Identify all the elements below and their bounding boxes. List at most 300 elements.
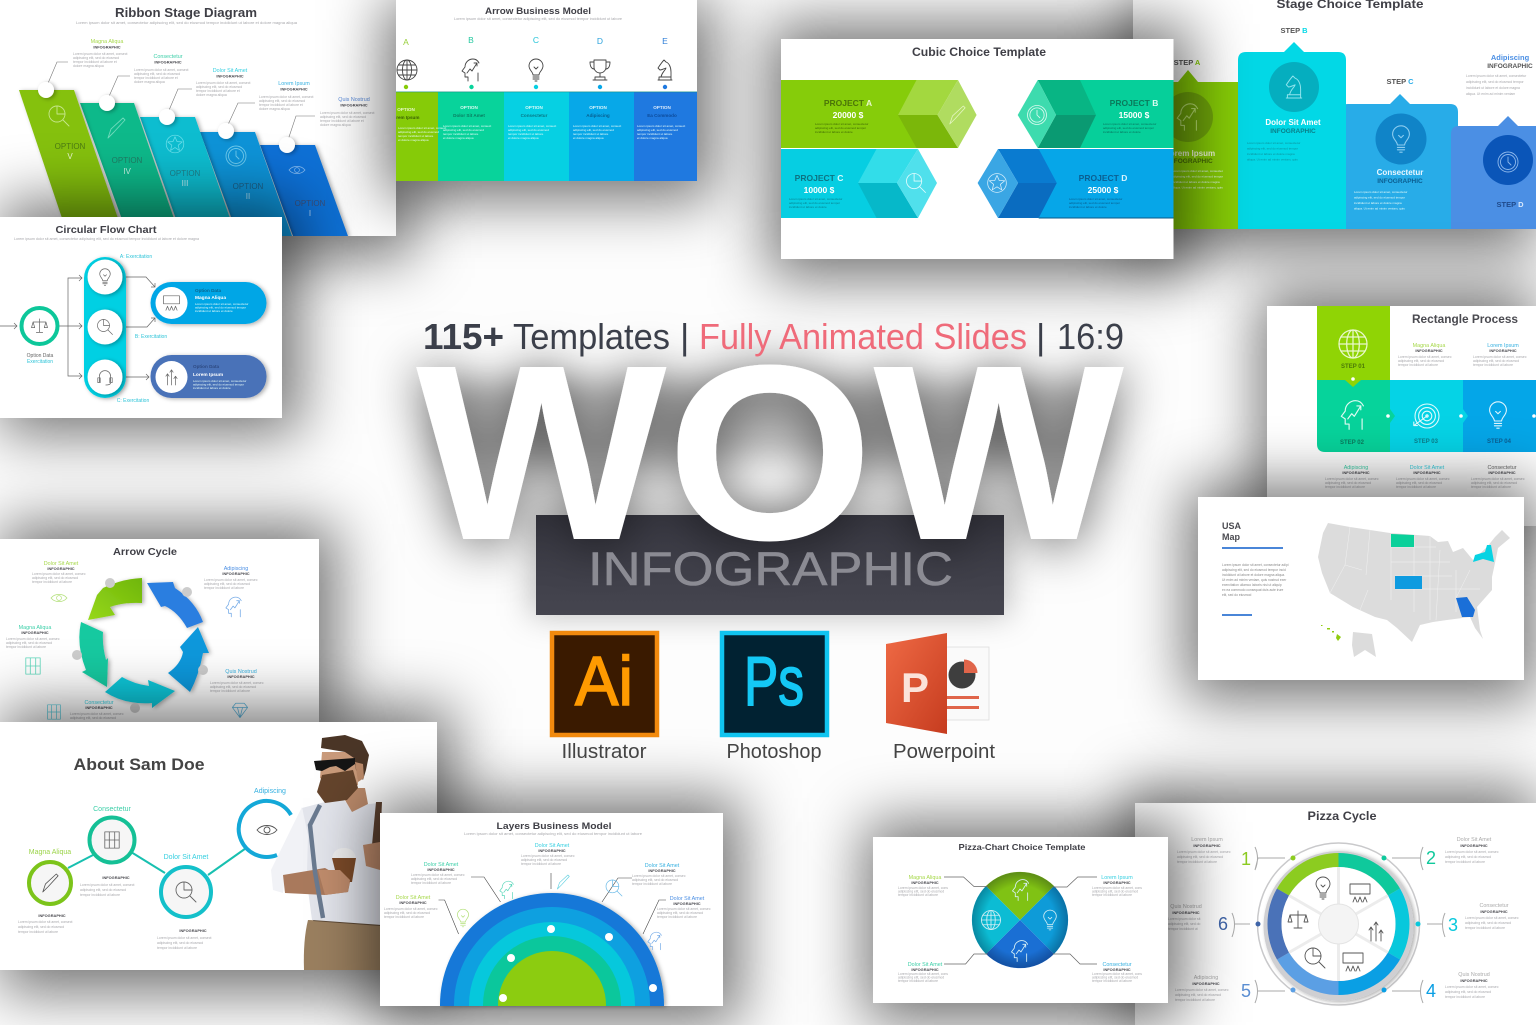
stage label: adipiscing: aliqua. Ut enim ad minim veniam [1466, 92, 1515, 96]
layer labels: adipiscing elit, sed do eiusmod [657, 911, 703, 915]
big WOW word: WOW [416, 313, 1124, 592]
rectangle labels: adipiscing elit, sed do eiusmod [1471, 481, 1517, 485]
four quadrant pie [972, 872, 1068, 968]
heading: pizza-chart choice template: Pizza-Chart Choice Template [958, 842, 1086, 852]
project D band and cube: incididunt ut labore et dolore [1069, 205, 1107, 209]
USA paragraph: Ut enim ad minim veniam, quis nostrud exer [1222, 578, 1287, 582]
column text: Adipiscing [586, 113, 610, 118]
pizza labels: Dolor Sit Amet [1457, 837, 1492, 843]
node: consectetur: Consectetur [93, 806, 132, 813]
project D band and cube: PROJECT D [1079, 173, 1127, 183]
cycle numbers [72, 578, 208, 713]
stage C [1340, 77, 1458, 229]
ribbon labels: Quis Nostrud [338, 97, 370, 103]
heading: about Sam Doe: About Sam Doe [74, 756, 204, 774]
about text blocks: tempor incididunt ut labore [18, 930, 58, 934]
panel: arrow business model: et dolore magna aliqua [398, 138, 429, 142]
steps 02 to 04 row: STEP 02 [1340, 440, 1365, 446]
rectangle labels: Lorem ipsum dolor sit amet, consec [1473, 355, 1527, 359]
pizza numbers: 3 [1448, 915, 1458, 935]
ribbon labels: tempor incididunt ut labore et [259, 103, 303, 107]
stage C: adipiscing elit, sed do eiusmod tempor [1354, 196, 1405, 200]
ribbon: option V [19, 88, 121, 217]
panel: circular flow chart: Lorem ipsum dolor sit amet, consectetur adipiscing elit, sed do eiusmod tempor incididunt ut labore et dolore magna [14, 237, 199, 241]
about text blocks: INFOGRAPHIC [102, 875, 130, 880]
heading: circular flow chart: Circular Flow Chart [56, 224, 157, 236]
USA paragraph: incididunt ut labore et dolore magna aliqua. [1222, 573, 1285, 577]
cycle labels: INFOGRAPHIC [47, 566, 75, 571]
cycle labels: tempor incididunt ut labore [6, 645, 46, 649]
stage C: incididunt ut labore et dolore magna [1354, 201, 1402, 205]
project D band and cube: Lorem ipsum dolor sit amet, consectetur [1069, 197, 1122, 201]
pie labels: INFOGRAPHIC [1103, 967, 1131, 972]
ribbon labels: INFOGRAPHIC [154, 60, 182, 64]
panel: pizza-chart choice template [873, 837, 1168, 1003]
panel: arrow business model: tempor incididunt ut labore [508, 132, 544, 136]
rectangle labels: adipiscing elit, sed do eiusmod [1396, 481, 1442, 485]
ribbon labels: Lorem ipsum dolor sit amet, consect [196, 81, 251, 85]
project A band and cube: Lorem ipsum dolor sit amet, consectetur [815, 122, 868, 126]
column letters [403, 37, 668, 45]
pizza labels: INFOGRAPHIC [1460, 978, 1488, 983]
pizza labels: INFOGRAPHIC [1172, 910, 1200, 915]
ribbon: option IV: IV [123, 167, 131, 176]
rectangle labels: adipiscing elit, sed do eiusmod [1473, 359, 1519, 363]
project B band and cube [1018, 80, 1174, 148]
columns A to E [396, 91, 697, 181]
panel: USA map [1198, 497, 1524, 680]
pie labels: INFOGRAPHIC [911, 967, 939, 972]
pizza labels: adipiscing elit, sed do [1168, 922, 1201, 926]
rectangle labels: Adipiscing [1344, 465, 1368, 471]
stage label: adipiscing: INFOGRAPHIC [1487, 63, 1533, 70]
stage C: aliqua. Ut enim ad minim veniam, quis [1354, 206, 1405, 210]
tagline: | [680, 316, 689, 357]
heading: cubic choice template: Cubic Choice Template [912, 47, 1046, 59]
project A band and cube: adipiscing elit, sed do eiusmod tempor [815, 126, 866, 130]
pizza labels: Lorem Ipsum [1191, 837, 1223, 843]
pizza labels: INFOGRAPHIC [1192, 981, 1220, 986]
heading: pizza cycle: Pizza Cycle [1308, 811, 1376, 823]
ribbon labels: adipiscing elit, sed do eiusmod [259, 99, 305, 103]
tagline: Fully Animated Slides [699, 316, 1027, 357]
ribbon labels: Consectetur [153, 54, 183, 60]
heading: ribbon stage diagram: Ribbon Stage Diagram [115, 6, 257, 20]
ribbon labels: Lorem ipsum dolor sit amet, consect [320, 111, 375, 115]
ribbon labels: adipiscing elit, sed do eiusmod [134, 72, 180, 76]
about text blocks: tempor incididunt ut labore [80, 893, 120, 897]
result pill: lorem ipsum: adipiscing elit, sed do eiusmod tempor [193, 383, 244, 387]
project C band and cube [781, 149, 937, 218]
node: dolor sit amet [161, 854, 211, 917]
panel: ribbon stage diagram [0, 0, 396, 236]
project B band and cube: 15000 $ [1119, 110, 1150, 120]
panel: arrow business model: adipiscing elit, sed do eiusmod [573, 128, 614, 132]
cycle labels: tempor incididunt ut labore [210, 689, 250, 693]
stage B: Dolor Sit Amet [1265, 118, 1321, 127]
flow labels: C: Exercitation [117, 398, 149, 404]
arrow: green [88, 578, 142, 620]
pie labels: tempor incididunt ut labore [898, 893, 938, 897]
tagline: 115+ [423, 316, 504, 357]
pie labels: tempor incididunt ut labore [1092, 979, 1132, 983]
layer labels: Lorem ipsum dolor sit amet, consec [411, 873, 465, 877]
stage B: adipiscing elit, sed do eiusmod tempor [1247, 146, 1298, 150]
cycle labels: tempor incididunt ut labore [204, 586, 244, 590]
ribbon: option IV [80, 102, 177, 217]
panel: arrow business model: tempor incididunt ut labore [637, 132, 673, 136]
pie leader lines [944, 877, 1097, 964]
pizza labels: tempor incididunt ut [1168, 927, 1198, 931]
panel: cubic choice template [781, 39, 1174, 259]
node: consectetur [90, 806, 134, 862]
rectangle labels [1325, 343, 1527, 489]
stage A: incididunt ut labore et dolore magna [1172, 180, 1220, 184]
dome layers [440, 893, 664, 1006]
heading: USA map: USA [1222, 521, 1242, 531]
pizza labels: tempor incididunt ut labore [1177, 860, 1217, 864]
column letters: D [597, 36, 603, 46]
cycle labels: adipiscing elit, sed do eiusmod [32, 576, 78, 580]
column letters: E [662, 36, 668, 46]
cycle labels: INFOGRAPHIC [222, 571, 250, 576]
rectangle labels: tempor incididunt ut labore [1473, 363, 1513, 367]
pizza labels: Lorem ipsum dolor sit amet, consec [1175, 988, 1229, 992]
pizza labels: Lorem ipsum dolor sit [1168, 917, 1200, 921]
stage C: Consectetur [1377, 168, 1423, 177]
pizza dots [1256, 856, 1420, 992]
pie labels: tempor incididunt ut labore [898, 979, 938, 983]
layer leader lines [438, 873, 666, 934]
pie labels: adipiscing elit, sed do eiusmod [898, 890, 944, 894]
result pill: lorem ipsum: incididunt ut labore et dolore [193, 386, 231, 390]
USA paragraph: Lorem ipsum dolor sit amet, consectetur adipi [1222, 563, 1289, 567]
rectangle labels: tempor incididunt ut labore [1325, 485, 1365, 489]
stage B: incididunt ut labore et dolore magna [1247, 152, 1295, 156]
cycle labels [6, 561, 264, 720]
flow labels: A: Exercitation [120, 254, 152, 260]
steps 02 to 04 row: STEP 03 [1414, 439, 1439, 445]
column text: Ea Commodo [647, 113, 677, 118]
rectangle labels: adipiscing elit, sed do eiusmod [1325, 481, 1371, 485]
tagline: Templates [513, 316, 670, 357]
stage A: STEP A [1174, 58, 1201, 67]
cycle icons [26, 594, 248, 719]
pizza numbers: 2 [1426, 848, 1436, 868]
pizza labels: Lorem ipsum dolor sit amet, consec [1445, 985, 1499, 989]
pie labels: Dolor Sit Amet [908, 962, 943, 968]
result pill: magna aliqua: Option Data [195, 288, 221, 293]
ribbon: option I [260, 145, 348, 236]
project A band and cube [781, 80, 977, 148]
icon: Illustrator: Ai [575, 642, 633, 720]
cycle labels: INFOGRAPHIC [85, 705, 113, 710]
ribbon labels: tempor incididunt ut labore et [320, 119, 364, 123]
stage D: STEP D [1497, 200, 1524, 209]
stage B: aliqua. Ut enim ad minim veniam, quis [1247, 158, 1298, 162]
ribbon labels: adipiscing elit, sed do eiusmod [320, 115, 366, 119]
pie labels: adipiscing elit, sed do eiusmod [1092, 976, 1138, 980]
stage C: INFOGRAPHIC [1377, 178, 1423, 185]
result pill: lorem ipsum [150, 355, 266, 398]
pizza numbers: 1 [1241, 849, 1251, 869]
pie icons [982, 880, 1056, 961]
node: magna aliqua: Magna Aliqua [29, 849, 71, 856]
panel: arrow business model: Lorem ipsum dolor sit amet, consectetur adipiscing elit, sed do eiusmod tempor incididunt ut labore [454, 17, 622, 21]
column text: Lorem Ipsum [391, 115, 419, 120]
ribbon: option V: OPTION [55, 142, 86, 151]
rectangle labels: Lorem ipsum dolor sit amet, consec [1398, 355, 1452, 359]
layer labels: INFOGRAPHIC [399, 900, 427, 905]
ribbon labels [73, 39, 375, 127]
step 01: STEP 01 [1341, 364, 1366, 370]
stage B: Lorem ipsum dolor sit amet, consectetur [1247, 141, 1300, 145]
column dots [404, 85, 667, 89]
stage label: adipiscing: adipiscing elit, sed do eiusmod tempor [1466, 80, 1525, 84]
panel: arrow business model [391, 0, 697, 181]
layer labels [384, 843, 711, 919]
panel: arrow business model: Lorem ipsum dolor sit amet, consect [443, 124, 491, 128]
layer labels: INFOGRAPHIC [427, 867, 455, 872]
ribbon markers [38, 82, 295, 153]
pizza labels: Quis Nostrud [1458, 972, 1490, 978]
heading: arrow business model: Arrow Business Model [485, 6, 591, 17]
label: Powerpoint: Powerpoint [893, 741, 995, 763]
vertical pill [84, 257, 126, 398]
ribbon labels: tempor incididunt ut labore et [196, 89, 240, 93]
arrow: cyan [105, 677, 175, 708]
ribbon: option III: III [182, 179, 188, 188]
pie labels: adipiscing elit, sed do eiusmod [1092, 890, 1138, 894]
panel: circular flow chart [0, 217, 282, 418]
layer labels: INFOGRAPHIC [673, 901, 701, 906]
column text: OPTION [460, 105, 478, 110]
ribbon: option II: II [246, 192, 250, 201]
pizza numbers: 4 [1426, 981, 1436, 1001]
flow labels: Exercitation [27, 359, 53, 365]
project A band and cube: PROJECT A [824, 98, 872, 108]
ribbon labels: INFOGRAPHIC [93, 44, 121, 50]
USA paragraph: adipiscing elit, sed do eiusmod tempor incid [1222, 568, 1286, 572]
panel: arrow business model: adipiscing elit, sed do eiusmod [443, 128, 484, 132]
panel: stage choice template [1133, 0, 1536, 229]
ribbon labels: tempor incididunt ut labore et [134, 76, 178, 80]
pizza labels: Adipiscing [1194, 975, 1218, 981]
USA paragraph: elit, sed do eiusmod [1222, 593, 1251, 597]
rectangle labels: Lorem ipsum dolor sit amet, consec [1396, 477, 1450, 481]
panel: arrow cycle [0, 539, 319, 722]
ribbon labels: dolore magna aliqua [259, 107, 290, 111]
panel: layers business model [380, 813, 723, 1006]
icon: Powerpoint [886, 633, 989, 734]
node: magna aliqua [29, 849, 71, 904]
panel: arrow business model: adipiscing elit, sed do eiusmod [398, 130, 439, 134]
about text blocks: adipiscing elit, sed do eiusmod [18, 925, 64, 929]
tagline: | [1036, 316, 1045, 357]
rectangle labels: Dolor Sit Amet [1410, 465, 1445, 471]
panel: layers business model: Lorem ipsum dolor sit amet, consectetur adipiscing elit, sed do eiusmod tempor incididunt ut labore [464, 832, 642, 836]
stage C: Lorem ipsum dolor sit amet, consectetur [1354, 190, 1407, 194]
ribbon labels: Lorem ipsum dolor sit amet, consect [73, 52, 128, 56]
ribbon labels: adipiscing elit, sed do eiusmod [73, 56, 119, 60]
pizza labels: tempor incididunt ut labore [1445, 860, 1485, 864]
project D band and cube: 25000 $ [1088, 185, 1119, 195]
ribbon leader lines [46, 62, 315, 143]
cycle labels: Consectetur [84, 700, 114, 706]
column letters: C [533, 35, 539, 45]
pizza labels: Consectetur [1479, 903, 1509, 909]
cycle labels: Lorem ipsum dolor sit amet, consec [6, 637, 60, 641]
rectangle labels: INFOGRAPHIC [1488, 470, 1516, 475]
ribbon labels: dolore magna aliqua [73, 64, 104, 68]
ribbon: option III: OPTION [170, 169, 201, 178]
layer icons [457, 875, 661, 950]
stage D [1451, 116, 1536, 229]
pizza numbers [1218, 848, 1458, 1001]
ribbon labels: Lorem ipsum dolor sit amet, consect [259, 95, 314, 99]
layer labels: Lorem ipsum dolor sit amet, consec [521, 854, 575, 858]
node: adipiscing: Adipiscing [254, 788, 286, 795]
project B band and cube: adipiscing elit, sed do eiusmod tempor [1103, 126, 1154, 130]
pizza labels: adipiscing elit, sed do eiusmod [1445, 855, 1491, 859]
rectangle labels: Consectetur [1487, 465, 1517, 471]
pizza labels: tempor incididunt ut labore [1445, 995, 1485, 999]
layer labels: INFOGRAPHIC [648, 868, 676, 873]
cycle labels: adipiscing elit, sed do eiusmod [70, 716, 116, 720]
panel: pizza cycle [1135, 803, 1536, 1025]
cycle labels: Adipiscing [224, 566, 248, 572]
ribbon labels: Lorem ipsum dolor sit amet, consect [134, 68, 189, 72]
rectangle labels: tempor incididunt ut labore [1396, 485, 1436, 489]
column letters: A [403, 37, 409, 47]
pizza labels: adipiscing elit, sed do eiusmod [1175, 993, 1221, 997]
pie labels: Lorem ipsum dolor sit amet, cons [898, 886, 948, 890]
project C band and cube: incididunt ut labore et dolore [789, 205, 827, 209]
node: adipiscing [239, 788, 295, 857]
panel: arrow business model: adipiscing elit, sed do eiusmod [637, 128, 678, 132]
pizza labels: Quis Nostrud [1170, 904, 1202, 910]
cycle labels: adipiscing elit, sed do eiusmod [204, 582, 250, 586]
panel: arrow business model: Lorem ipsum dolor sit amet, consect [508, 124, 556, 128]
pill nodes [88, 260, 122, 394]
pizza labels: INFOGRAPHIC [1193, 843, 1221, 848]
pie labels: tempor incididunt ut labore [1092, 893, 1132, 897]
result pill: magna aliqua: Magna Aliqua [195, 295, 226, 301]
pizza numbers: 5 [1241, 981, 1251, 1001]
panel: arrow business model: et dolore magna aliqua [443, 136, 474, 140]
rectangle labels: INFOGRAPHIC [1415, 348, 1443, 353]
about text blocks: tempor incididunt ut labore [157, 946, 197, 950]
icon: Illustrator [552, 633, 657, 735]
pizza labels: Lorem ipsum dolor sit amet, consec [1465, 916, 1519, 920]
ribbon: option III [140, 116, 233, 217]
project C band and cube: 10000 $ [804, 185, 835, 195]
pizza labels: adipiscing elit, sed do eiusmod [1465, 921, 1511, 925]
heading: arrow cycle: Arrow Cycle [113, 546, 177, 558]
layer labels: Dolor Sit Amet [645, 863, 680, 869]
layer labels: adipiscing elit, sed do eiusmod [632, 878, 678, 882]
layer labels: Lorem ipsum dolor sit amet, consec [632, 874, 686, 878]
label: Photoshop: Photoshop [726, 741, 822, 763]
ribbon: option II: OPTION [233, 182, 264, 191]
about text blocks [18, 875, 212, 950]
column text: Consectetur [521, 113, 548, 118]
result pill: magna aliqua: incididunt ut labore et dolore [195, 309, 233, 313]
pizza labels: tempor incididunt ut labore [1175, 998, 1215, 1002]
layer labels: Dolor Sit Amet [670, 896, 705, 902]
stage label: adipiscing [1466, 53, 1533, 96]
cycle labels: adipiscing elit, sed do eiusmod [6, 641, 52, 645]
layer labels: tempor incididunt ut labore [657, 915, 697, 919]
pizza labels: adipiscing elit, sed do eiusmod [1177, 855, 1223, 859]
tagline [423, 316, 1124, 357]
ribbon labels: INFOGRAPHIC [340, 102, 368, 108]
project B band and cube: PROJECT B [1110, 98, 1158, 108]
flow connector arrows [0, 275, 155, 380]
stage label: adipiscing: Lorem ipsum dolor sit amet, consectetur [1466, 74, 1527, 78]
layer labels: Dolor Sit Amet [535, 843, 570, 849]
pizza labels: Lorem ipsum dolor sit amet, consec [1177, 850, 1231, 854]
project B band and cube: incididunt ut labore et dolore [1103, 130, 1141, 134]
column text: OPTION [589, 105, 607, 110]
cycle labels: Lorem ipsum dolor sit amet, consec [32, 572, 86, 576]
ribbon: option IV: OPTION [112, 156, 143, 165]
stage A: Lorem ipsum dolor sit amet, consectet [1172, 169, 1223, 173]
project C band and cube: PROJECT C [795, 173, 843, 183]
ribbon labels: dolore magna aliqua [320, 123, 351, 127]
pizza labels: adipiscing elit, sed do eiusmod [1445, 990, 1491, 994]
ribbon labels: INFOGRAPHIC [280, 86, 308, 92]
rectangle labels: tempor incididunt ut labore [1398, 363, 1438, 367]
layer labels: adipiscing elit, sed do eiusmod [521, 858, 567, 862]
rectangle labels: INFOGRAPHIC [1342, 470, 1370, 475]
USA paragraph: exercitation ullamco laboris nisi ut aliquip [1222, 583, 1282, 587]
pie labels: Magna Aliqua [909, 875, 941, 881]
pie labels: Lorem ipsum dolor sit amet, cons [898, 972, 948, 976]
source node [22, 308, 58, 344]
arrow: blue [147, 582, 203, 628]
about text blocks: INFOGRAPHIC [38, 913, 66, 918]
layer labels: Dolor Sit Amet [396, 895, 431, 901]
layer labels: Lorem ipsum dolor sit amet, consec [384, 907, 438, 911]
ribbon icons [49, 106, 305, 174]
layer labels: adipiscing elit, sed do eiusmod [384, 911, 430, 915]
panel: rectangle process [1267, 306, 1536, 526]
column text [391, 105, 677, 120]
cycle labels: Dolor Sit Amet [44, 561, 79, 567]
ribbon labels: dolore magna aliqua [134, 80, 165, 84]
heading: USA map: Map [1222, 532, 1241, 542]
heading: rectangle process: Rectangle Process [1412, 314, 1518, 326]
pizza labels: INFOGRAPHIC [1480, 909, 1508, 914]
layer labels: adipiscing elit, sed do eiusmod [411, 877, 457, 881]
project C band and cube: adipiscing elit, sed do eiusmod tempor [789, 201, 840, 205]
tagline: 16:9 [1057, 316, 1124, 357]
cycle labels: Lorem ipsum dolor sit amet, consec [70, 712, 124, 716]
pizza labels: tempor incididunt ut labore [1465, 926, 1505, 930]
icon: Powerpoint: P [901, 664, 929, 711]
layer labels: INFOGRAPHIC [538, 848, 566, 853]
panel: arrow business model: Lorem ipsum dolor sit amet, consect [637, 124, 685, 128]
layer labels: tempor incididunt ut labore [632, 882, 672, 886]
project A band and cube: incididunt ut labore et dolore [815, 130, 853, 134]
steps 02 to 04 row: STEP 04 [1487, 439, 1512, 445]
cycle labels: Lorem ipsum dolor sit amet, consec [204, 578, 258, 582]
project B band and cube: Lorem ipsum dolor sit amet, consectetur [1103, 122, 1156, 126]
cycle labels: Quis Nostrud [225, 669, 257, 675]
ribbon labels: Dolor Sit Amet [213, 68, 248, 74]
cycle labels: adipiscing elit, sed do eiusmod [210, 685, 256, 689]
